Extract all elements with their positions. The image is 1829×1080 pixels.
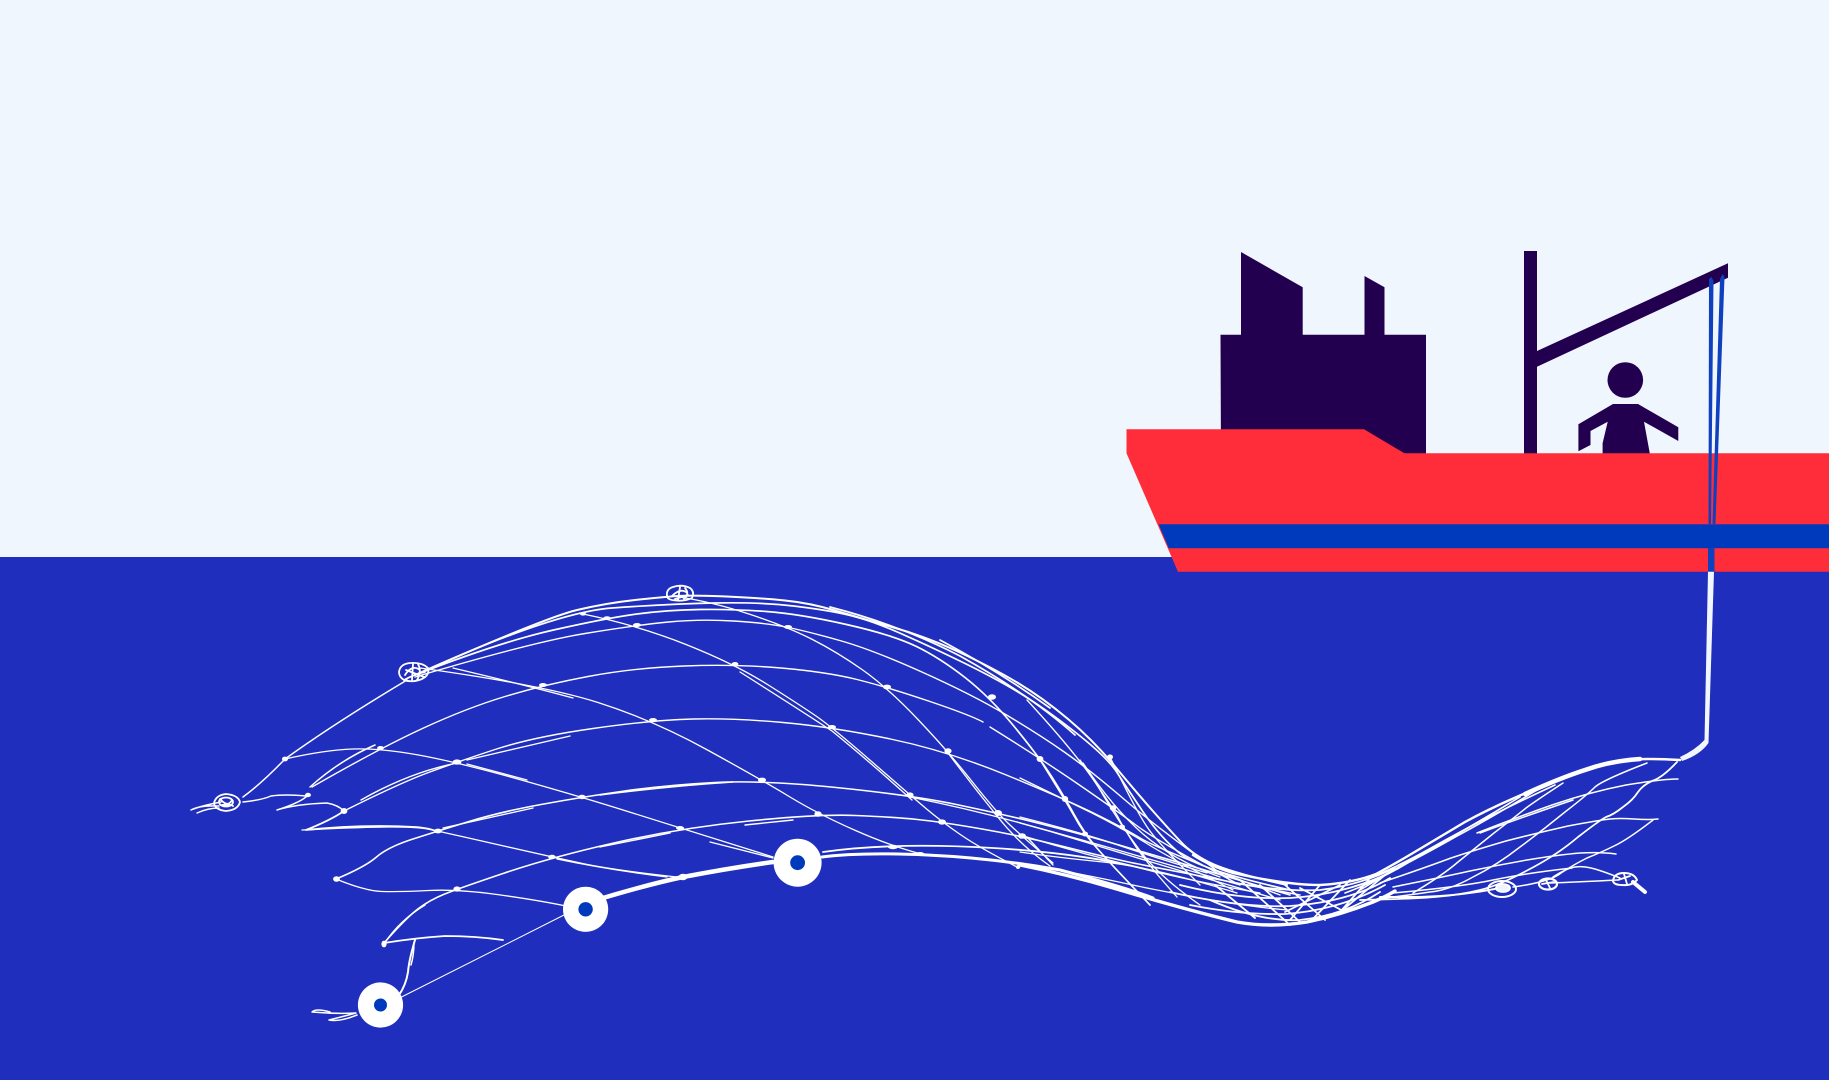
rope from hull to net [1680,572,1714,761]
net: knot points [282,612,1125,947]
float buoy: left [358,982,403,1028]
net: thick float line [603,846,1395,925]
net: right side edge [1193,759,1680,893]
net: right free ends [1360,762,1678,900]
net: left free ends [191,680,564,1020]
hull stripe [1159,524,1829,548]
net: diagonal strands [285,597,1287,910]
hull [1126,429,1829,572]
sky background [0,0,1829,557]
lines from boom down through hull [1708,274,1724,572]
float buoy: right [774,839,822,887]
boat cabin with funnels [1220,252,1426,460]
float buoy: middle [563,887,608,932]
net: top edge strands [415,596,1290,905]
net: tangled knots [214,586,1637,897]
fishing net [191,586,1680,1020]
sea background [0,557,1829,1080]
mast and boom [1524,251,1728,460]
net: long horizontal rows [312,665,1300,943]
fisherman [1578,362,1678,460]
net: dense mesh at the gather point [1170,868,1395,925]
fishing boat [1126,251,1829,572]
